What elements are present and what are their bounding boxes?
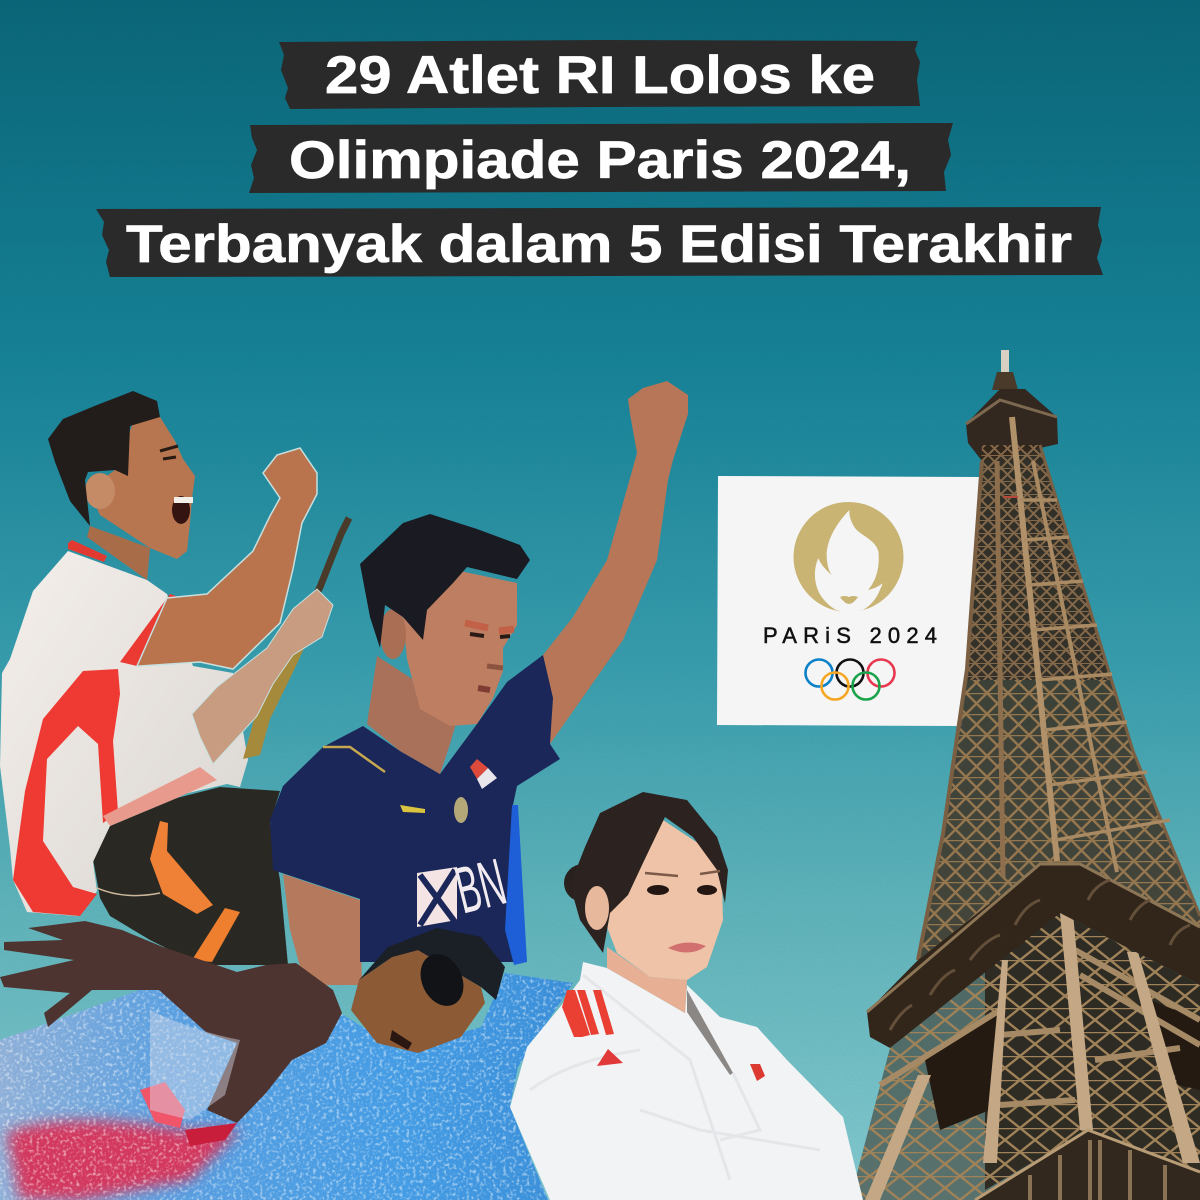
olympic rings [806,660,894,700]
silat forearm and hand [192,589,333,764]
silat neck [87,526,150,580]
swimsuit [140,1082,237,1146]
tower lower section [850,913,1200,1200]
athlete: badminton player [270,381,688,985]
swim mouth [390,1030,412,1050]
silat raised arm and fist [137,448,317,669]
goggles [412,947,472,1013]
neck [607,947,687,1013]
flag sheet [717,476,980,726]
red stripes [562,990,614,1037]
title [96,40,1103,277]
silat weapon [243,518,349,759]
gi inner shadow [687,990,733,1075]
pink reflection [7,1121,240,1200]
brand mark [400,805,425,813]
silat hair [48,391,160,526]
flag badge [750,1064,765,1081]
hair [360,514,530,648]
raised arm and fist [543,381,688,744]
swimmer arm and torso [0,921,342,1123]
title line 1 strip [279,40,920,109]
title line 3 strip: Terbanyak dalam 5 Edisi Terakhir [126,215,1072,274]
left arm [283,874,362,985]
adidas logo [597,1049,623,1066]
eyes, nose and mouth [465,623,514,690]
ear [585,886,609,930]
athlete: judoka [510,792,863,1200]
silat open mouth [172,496,193,524]
gold shoulder stripe [323,747,385,772]
swim cap [359,928,505,1000]
red side panel [13,669,120,916]
tower base arch [975,1130,1200,1200]
silat pants [93,787,288,965]
silat eye and brow [160,446,178,459]
tower upper section [918,417,1200,960]
swimmer face [351,950,485,1053]
eiffel tower [850,350,1200,1200]
silat head [88,417,195,559]
silat shirt [0,540,248,916]
tower spire [992,350,1018,390]
paris 2024 wordmark: PARiS 2024 [763,623,937,648]
sponsor panel [417,867,457,927]
silat ear [85,473,115,509]
ear [380,609,406,659]
head [403,571,517,726]
tower top observation deck [966,389,1058,461]
face [607,820,723,980]
red collar [68,540,107,562]
gi fold lines [530,975,820,1180]
tower cream columns [865,913,1200,1200]
paris 2024 logo card [717,476,980,726]
title line 1 strip: 29 Atlet RI Lolos ke [325,46,875,105]
judo gi [510,962,863,1200]
blue side panel [505,805,527,965]
neck [367,656,460,774]
lips, eyes and brows [645,871,720,953]
red sleeve band [120,594,182,666]
tower second platform [867,864,1200,1048]
waist band [103,767,217,826]
jersey accents: BN [448,844,513,927]
athlete: swimmer in water [0,921,580,1200]
title line 2 strip: Olimpiade Paris 2024, [289,131,911,190]
jersey accents [323,747,527,965]
title line 3 strip [96,207,1103,277]
paris flame emblem [794,502,904,614]
splash over torso [150,1010,240,1120]
navy jersey [270,655,560,962]
title line 2 strip [249,123,953,193]
flag badge [470,759,488,779]
water spray [0,970,580,1200]
hair [564,792,728,953]
water base [0,973,573,1200]
badge [454,797,468,823]
athlete: pencak silat [0,391,349,965]
